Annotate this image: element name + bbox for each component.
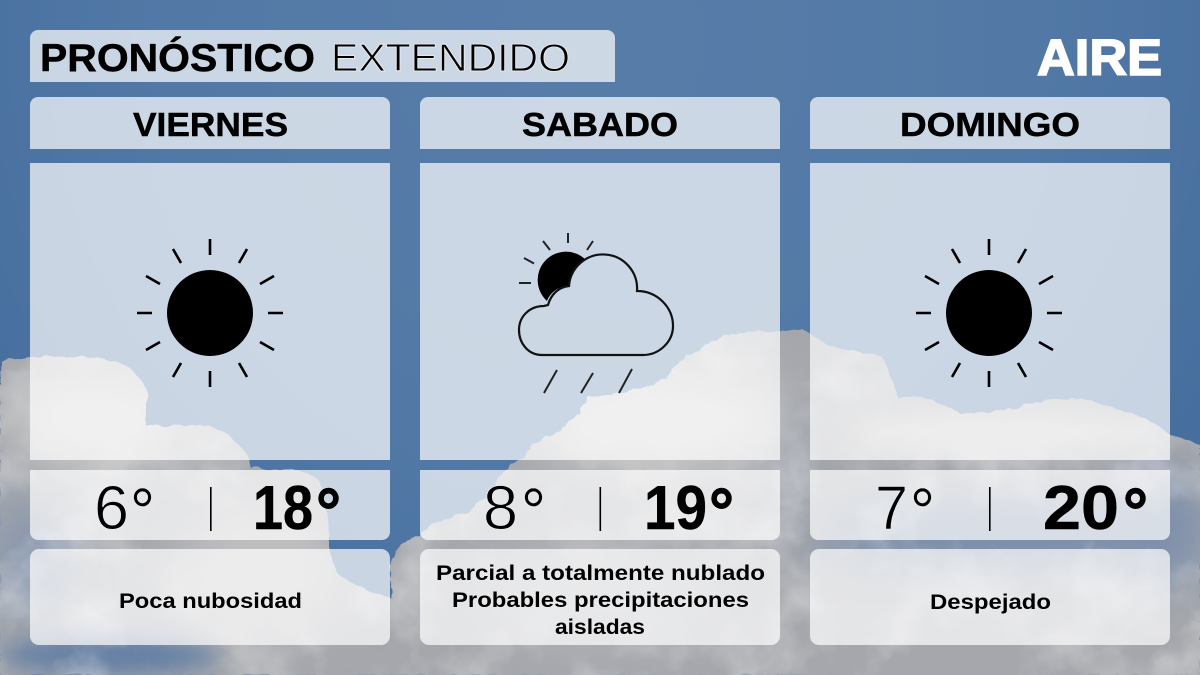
description: viernes [30,549,390,645]
temperatures: domingo: 20 [1043,474,1119,543]
day header: sabado: SABADO [522,106,678,143]
background: cloud edge backing [0,385,1200,675]
day header: viernes [30,97,390,149]
day header: domingo: DOMINGO [900,106,1080,143]
temperatures: domingo [810,470,1170,548]
panel: domingo [810,97,1170,645]
temperatures: viernes: 6 [94,474,129,543]
icon panel: viernes [30,163,390,460]
day header: viernes: VIERNES [133,106,288,143]
icon panel: sabado [420,163,780,460]
icon: sun [137,239,283,387]
day header: domingo [810,97,1170,149]
background: clouds [0,320,1200,675]
title: light part: EXTENDIDO [331,37,570,80]
temperatures: sabado: 8 [483,474,518,543]
description: sabado: Probables precipitaciones [452,589,749,612]
temperatures: sabado: ° [521,474,546,548]
temperatures: viernes: ° [130,474,155,548]
temperatures: viernes: 18 [253,474,313,543]
temperatures: sabado: ° [709,474,734,548]
icon panel: domingo [810,163,1170,460]
description: viernes: Poca nubosidad [119,590,302,613]
title: bold part: PRONÓSTICO [40,36,315,80]
description: sabado [420,549,780,645]
temperatures: viernes: ° [316,474,341,548]
temperatures: sabado: 19 [644,474,707,543]
description: domingo [810,549,1170,645]
icon: sun [916,239,1062,387]
temperatures: domingo: 7 [875,474,908,543]
description: domingo: Despejado [930,591,1051,614]
description: sabado: aisladas [555,616,645,639]
panel: sabado [420,97,780,645]
temperatures: sabado [420,470,780,548]
panel: viernes [30,97,390,645]
description: sabado: Parcial a totalmente nublado [436,562,765,585]
icon: cloud with sun and rain [519,233,673,393]
temperatures: viernes [30,470,390,548]
header: title bar [30,30,615,82]
logo: AIRE: AIRE [1037,29,1162,86]
day header: sabado [420,97,780,149]
temperatures: domingo: ° [1123,474,1148,548]
temperatures: domingo: ° [910,474,935,548]
